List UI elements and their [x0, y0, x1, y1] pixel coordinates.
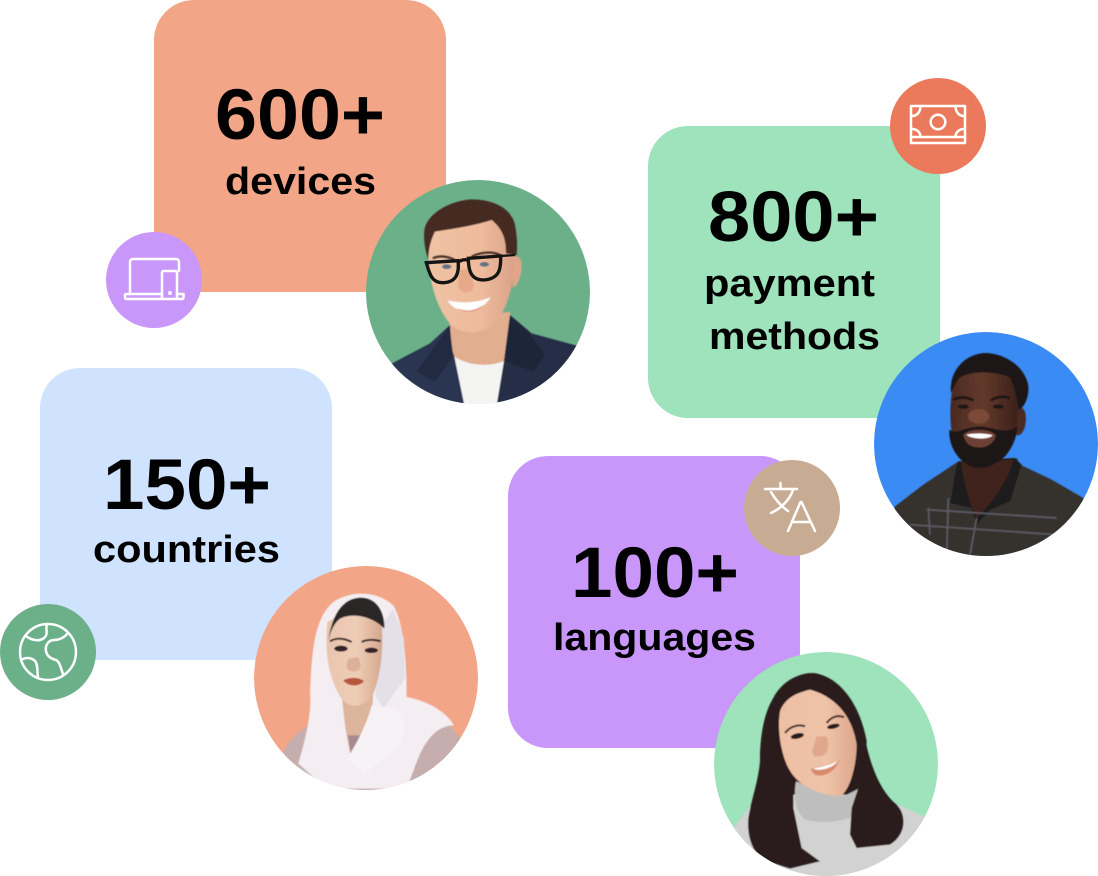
card background: countries	[40, 368, 332, 660]
card background: languages	[508, 456, 800, 748]
label: languages: languages	[553, 617, 756, 659]
stat: 150+: 150+	[103, 446, 271, 525]
photo: man with glasses	[366, 180, 590, 415]
icon: translate	[744, 460, 840, 556]
stat: 100+: 100+	[571, 534, 739, 613]
panel: payment methods	[648, 78, 1098, 561]
card background: payment methods	[648, 126, 940, 418]
icon: banknote	[890, 78, 986, 174]
label: payment methods: methods	[709, 316, 880, 358]
label: devices: devices	[225, 161, 376, 203]
icon: globe	[0, 604, 96, 700]
label: payment methods: payment	[704, 263, 875, 305]
panel: devices	[106, 0, 590, 415]
icon: laptop and tablet	[106, 232, 202, 328]
card background: devices	[154, 0, 446, 292]
stat: 600+: 600+	[215, 76, 385, 155]
panel: languages	[508, 456, 940, 876]
photo: woman with white scarf	[254, 566, 478, 795]
photo: woman in grey sweater	[714, 652, 940, 876]
panel: countries	[0, 368, 478, 795]
stat: 800+: 800+	[708, 178, 879, 257]
label: payment methods	[704, 263, 880, 358]
label: countries: countries	[93, 529, 280, 571]
photo: man in dark shirt	[874, 332, 1098, 561]
